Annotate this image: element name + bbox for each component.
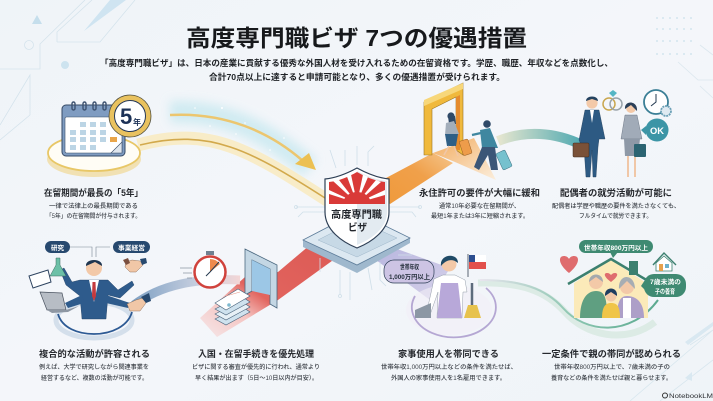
text: benefit 5: 入国・在留手続きを優先処理 [198, 348, 315, 359]
broom [471, 283, 473, 305]
title: 高度専門職ビザ 7つの優遇措置 [186, 25, 527, 51]
book [29, 270, 51, 288]
arc: blue to pink from multi-activity to stopwatch [134, 280, 240, 305]
bubble: income: 世帯年収800万円以上 [584, 243, 648, 252]
text: benefit 4: 経営するなど、複数の活動が可能です。 [41, 374, 148, 382]
flask [50, 258, 66, 276]
purple ring [406, 285, 492, 335]
small house [653, 253, 676, 271]
red rising sun emblem [329, 172, 385, 204]
woman [626, 103, 636, 113]
calendar [62, 105, 125, 156]
text: benefit 3: 配偶者の就労活動が可能に [560, 187, 672, 198]
intro text [100, 57, 613, 82]
text: benefit 6: 外国人の家事使用人を1名雇用できます。 [391, 374, 506, 382]
text: benefit 4: 例えば、大学で研究しながら関連事業を [39, 363, 149, 371]
flag [467, 254, 469, 277]
icon: calendar with 5-year badge [47, 95, 151, 177]
text: benefit 6: 家事使用人を帯同できる [398, 348, 499, 359]
central shield on chip platform [294, 146, 422, 300]
bubble: child: 子の養育 [655, 286, 675, 296]
text: benefit 6: 世帯年収1,000万円以上などの条件を満たせば、 [381, 363, 517, 371]
text: benefit 2 [419, 187, 540, 220]
text: benefit 2: 通常10年必要な在留期間が、 [439, 202, 520, 210]
bubble: child [641, 274, 686, 297]
man [586, 97, 598, 109]
chip platform [303, 238, 410, 273]
text: benefit 3: 配偶者は学歴や職歴の要件を満たさなくても、 [552, 202, 680, 210]
band: red to entry procedures [200, 245, 336, 337]
OK bubble: OK [650, 126, 665, 136]
band: orange fade under the door [433, 138, 496, 180]
icon: calendar with 5-year badge: 年 [133, 117, 141, 127]
blue ring [56, 302, 132, 338]
dustpan [415, 303, 431, 318]
house [574, 260, 648, 318]
child [606, 290, 616, 302]
shield body [325, 168, 389, 248]
gate [424, 83, 463, 155]
band: purple to domestic worker [376, 245, 450, 300]
shield label: 高度専門職 [331, 208, 383, 221]
pill: research: 研究 [51, 243, 64, 252]
icon: working couple with rings, clock and OK bubble [573, 90, 671, 177]
text: benefit 3: フルタイムで就労できます。 [579, 212, 652, 220]
grandfather [589, 275, 603, 289]
decorative dots and lines: top right [656, 17, 713, 98]
heart left [560, 256, 578, 273]
arc: teal from door to couple [498, 134, 582, 145]
text: benefit 1 [44, 187, 143, 220]
gear [661, 106, 671, 116]
top handshake [123, 258, 147, 272]
badge [109, 95, 151, 137]
text: benefit 5: ビザに関する審査が優先的に行われ、通常より [192, 363, 320, 371]
text: benefit 1: 一律で法律上の最長期間である [49, 202, 138, 210]
laptop [40, 292, 66, 310]
icon: calendar with 5-year badge: 5 [120, 104, 132, 129]
text: benefit 7: 一定条件で親の帯同が認められる [542, 348, 681, 359]
text: benefit 1: 在留期間が最長の「5年」 [44, 187, 143, 198]
ribbon: gold path from calendar to shield [138, 138, 330, 202]
bubble: child: 7歳未満の [650, 277, 681, 286]
rings [603, 98, 615, 110]
heart in house [605, 273, 617, 282]
worker [442, 256, 456, 272]
text: benefit 2: 永住許可の要件が大幅に緩和 [419, 187, 540, 198]
man [60, 268, 134, 319]
icon: gate with travellers [424, 83, 512, 170]
text: benefit 6 [381, 348, 517, 382]
icon: businessman with multiple activities [29, 241, 151, 338]
central shield on chip platform: ビザ [348, 221, 367, 234]
text: benefit 4 [39, 348, 150, 382]
lower handshake [127, 293, 151, 311]
salary bubble: 1,000万円以上 [389, 272, 431, 281]
grandmother [620, 280, 634, 294]
icon: document stack [215, 289, 250, 325]
arc: green from maid to family [478, 280, 658, 335]
icon: priority gate [245, 249, 277, 308]
icon: stopwatch [180, 251, 226, 288]
connector lines [70, 247, 110, 257]
watermark: NotebookLM: NotebookLM [669, 393, 713, 400]
band: orange to permanent residency [386, 153, 453, 204]
salary bubble [384, 260, 434, 283]
salary bubble: 世帯年収 [400, 262, 420, 271]
traveller man [483, 120, 491, 128]
arrow: blue glow with gold arrow to shield [170, 107, 316, 170]
icon: family house [560, 240, 686, 318]
intro text: 「高度専門職ビザ」は、日本の産業に貢献する優秀な外国人材を受け入れるための在留資格です。学歴、職歴、年収などを点数化し、 [100, 57, 613, 68]
decorative lines: bottom right [630, 322, 713, 401]
text: benefit 1: 「5年」の在留期間が付与されます。 [46, 212, 141, 220]
gold platform [47, 141, 141, 177]
text: benefit 3 [552, 187, 680, 220]
text: benefit 5 [192, 348, 320, 382]
traveller woman [447, 112, 455, 120]
icon: domestic worker [384, 254, 496, 337]
pill: business: 事業経営 [118, 243, 146, 252]
text: benefit 7: 養育などの条件を満たせば親と暮らせます。 [551, 374, 672, 382]
text: benefit 7: 世帯年収800万円以上で、7歳未満の子の [554, 363, 670, 371]
text: benefit 7 [542, 348, 681, 382]
text: benefit 5: 早く結果が出ます（5日～10日以内が目安）。 [195, 374, 318, 382]
text: benefit 2: 最短1年または3年に短縮されます。 [431, 212, 529, 220]
chip traces [294, 146, 422, 300]
clock [644, 90, 668, 114]
text: benefit 4: 複合的な活動が許容される [39, 348, 150, 359]
decorative circuit corner: top left [0, 0, 135, 140]
intro text: 合計70点以上に達すると申請可能となり、多くの優遇措置が受けられます。 [209, 71, 505, 82]
